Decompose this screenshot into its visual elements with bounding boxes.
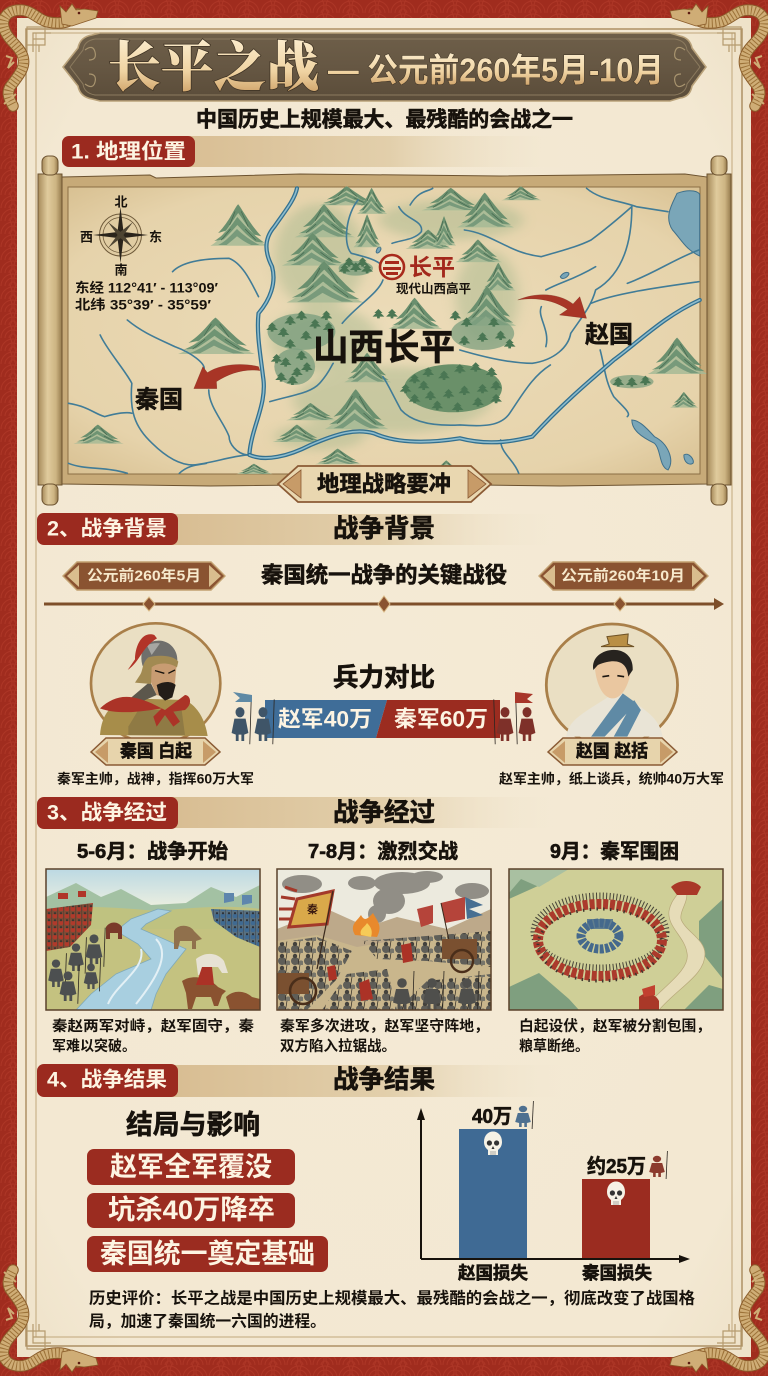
compass labels: 北 [114,194,128,210]
axes [421,1114,682,1259]
phase description: 秦军多次进攻，赵军坚守阵地， [280,1017,489,1035]
corner decoration: bottom-right dragon [670,1270,765,1372]
timeline heading: 秦国统一战争的关键战役 [261,562,507,588]
bar: Zhao troops: 赵军40万 [278,706,372,732]
illustration: encirclement [509,869,723,1010]
historical evaluation: 历史评价：长平之战是中国历史上规模最大、最残酷的会战之一，彻底改变了战国格 [89,1288,695,1308]
phase description [519,1017,711,1055]
historical evaluation [89,1288,695,1330]
phase 1: May-June [46,840,260,1055]
outcome 2: 坑杀40万降卒 [108,1195,275,1225]
phase description: 秦赵两军对峙，赵军固守，秦 [52,1017,255,1035]
bar: Zhao troops [265,700,387,738]
phase 2: July-August [277,839,491,1055]
right roller [707,156,731,505]
name plate: Bai Qi: 秦国 白起 [120,741,192,761]
arrow: toward Qin [194,364,260,389]
left roller [38,156,62,505]
section 4 heading: 4、战争结果 [47,1068,167,1092]
section 1 heading [62,136,570,167]
subtitle: 中国历史上规模最大、最残酷的会战之一 [196,108,573,132]
phase description [280,1017,489,1055]
name plate: Zhao Kuo [548,738,677,765]
map marker: Changping [380,254,471,296]
arrow: toward Zhao [518,295,587,318]
outcome 1: 赵军全军覆没 [110,1152,272,1182]
section 4 heading [37,1064,570,1097]
section 2 heading: 战争背景 [333,515,435,543]
map paper [62,174,707,486]
portrait: Zhao Kuo [546,624,678,765]
map plaque: 地理战略要冲 [317,472,451,496]
icon: Qin soldiers [494,692,535,744]
outcome 3: 秦国统一奠定基础 [100,1239,315,1269]
caption: Zhao Kuo: 赵军主帅，纸上谈兵，统帅40万大军 [499,770,724,786]
illustration: armies facing across river [46,869,260,1010]
outcome 1 [87,1149,295,1185]
corner decoration: top-left dragon [3,4,98,106]
section 1 heading: 1. 地理位置 [71,140,186,164]
forests [266,257,654,412]
timeline arrow [44,598,724,610]
icon: Zhao soldiers [232,692,274,744]
coordinates: 东经 112°41′ - 113°09′ [75,280,218,296]
phase description [52,1017,255,1055]
coordinates: 北纬 35°39′ - 35°59′ [75,296,211,312]
phase description: 双方陷入拉锯战。 [280,1037,396,1055]
tag: end date [539,562,708,590]
portrait: Bai Qi [91,623,220,765]
bar: Zhao losses: 赵国损失 [458,1263,528,1283]
phase description: 粮草断绝。 [519,1037,589,1055]
outcome heading: 结局与影响 [126,1110,260,1140]
bar: Qin losses: 约25万 [587,1155,646,1178]
historical evaluation: 局，加速了秦国统一六国的进程。 [89,1312,326,1330]
axis arrowheads [417,1108,690,1263]
compass labels: 西 [80,230,93,244]
bar: Zhao losses [458,1101,533,1283]
bar: Qin troops [376,700,500,738]
map drawing: lakes, rivers, mountains, forests [68,186,708,474]
bar chart: losses [417,1101,690,1283]
panel: scroll map [38,156,731,505]
title text: 长平之战 [108,38,319,98]
compass labels: 南 [114,262,128,278]
section 3 heading: 3、战争经过 [47,802,167,824]
map label: Shanxi Changping: 山西长平 [313,326,455,368]
compass labels: 东 [149,230,162,244]
map marker: Changping: 现代山西高平 [396,281,471,296]
corner decoration: top-right dragon [670,4,765,106]
tag: start date [63,562,225,590]
title banner [63,33,706,101]
tag: start date: 公元前260年5月 [87,566,201,584]
corner decoration: bottom-left dragon [3,1270,98,1372]
troop comparison [232,664,535,744]
map marker: Changping: 长平 [409,254,455,280]
tag: end date: 公元前260年10月 [561,566,685,584]
phase 3: September [509,839,723,1055]
section 2 heading: 2、战争背景 [47,518,167,540]
name plate: Bai Qi [91,738,220,765]
section 2 heading [37,513,560,545]
compass labels [80,194,162,278]
phase heading: 9月：秦军围困 [550,839,679,863]
compass rose [80,194,162,278]
lakes [376,191,700,470]
section 3 heading [37,797,560,829]
bar: Qin losses [582,1151,667,1283]
title dates: — 公元前260年5月-10月 [328,52,664,88]
panel: outcome and impact [87,1110,328,1272]
caption: Bai Qi: 秦军主帅，战神，指挥60万大军 [57,770,254,786]
section 4 heading: 战争结果 [333,1066,435,1094]
phase heading: 5-6月：战争开始 [77,840,228,863]
green haze under central mountains [270,200,523,450]
map plaque [278,466,491,502]
bar: Qin losses: 秦国损失 [582,1263,652,1283]
map label: Zhao: 赵国 [585,322,633,348]
mountains [73,186,708,474]
illustration: fierce battle [277,869,491,1013]
phase heading: 7-8月：激烈交战 [308,839,458,863]
section 3 heading: 战争经过 [333,799,435,827]
rivers [68,188,700,473]
phase description: 白起设伏，赵军被分割包围， [519,1017,711,1035]
timeline markers [143,596,626,612]
outcome 2 [87,1193,295,1228]
bar: Zhao losses: 40万 [472,1106,512,1128]
bar: Qin troops: 秦军60万 [394,706,488,732]
illustration: fierce battle: 秦 [307,902,318,916]
name plate: Zhao Kuo: 赵国 赵括 [576,741,648,761]
coordinates [75,280,218,312]
heading: troop comparison: 兵力对比 [333,664,435,692]
phase description: 军难以突破。 [52,1037,136,1055]
map label: Qin: 秦国 [135,386,183,414]
timeline [44,562,724,612]
